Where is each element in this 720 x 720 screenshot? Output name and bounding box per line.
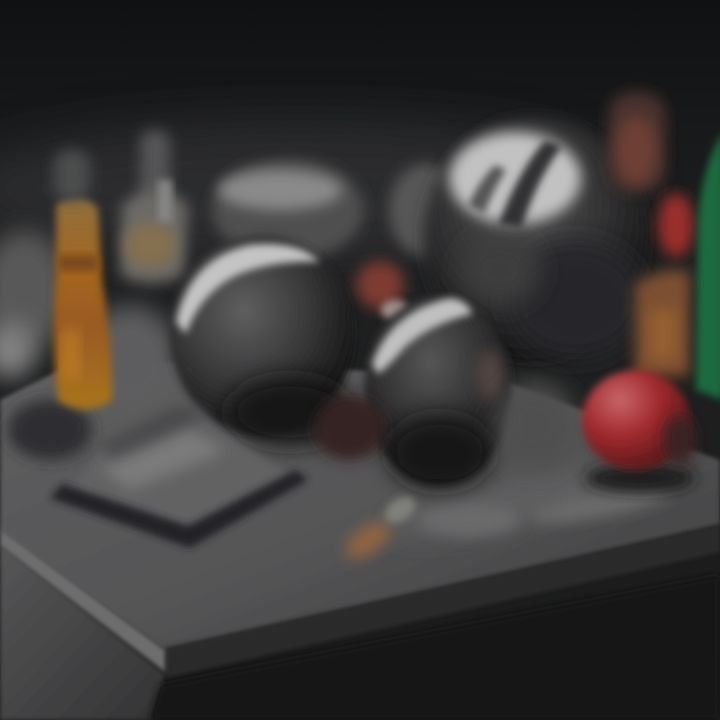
bottle: far right red-brown — [608, 92, 694, 380]
bottle neck — [54, 150, 90, 200]
sphere white highlight — [176, 244, 320, 334]
large sphere: back right — [423, 118, 647, 362]
tray lower rim — [50, 470, 308, 548]
sphere body — [423, 118, 647, 362]
bottle base shadow — [8, 400, 92, 460]
bottle body — [120, 190, 188, 284]
capsule body — [339, 514, 397, 566]
apple shadow — [585, 464, 695, 492]
sphere white highlight — [449, 132, 581, 224]
board: mottled patch centre — [420, 504, 520, 536]
back object: small grey jar — [389, 164, 461, 256]
bottle: second pale glass — [120, 130, 188, 284]
bottle: green at right edge — [696, 130, 720, 400]
board: top surface — [0, 360, 720, 650]
red blob — [356, 261, 404, 309]
amber bright streak — [650, 310, 676, 360]
sphere body — [364, 296, 512, 484]
small red accent in centre — [356, 261, 409, 320]
pale reflection — [381, 300, 409, 320]
apple body — [582, 370, 690, 470]
sphere dark stripe second — [468, 165, 506, 214]
tray: dark rounded plate on board — [50, 405, 308, 548]
glass reflection — [158, 180, 172, 222]
capsule light end — [380, 491, 420, 529]
bottle dark band — [58, 255, 98, 271]
warm reflection — [476, 351, 504, 399]
back object: silver dome centre — [212, 160, 364, 260]
bottle neck — [140, 130, 170, 202]
dark red object between spheres — [314, 396, 386, 460]
sphere shadow — [228, 378, 352, 446]
left haze: bright patch — [0, 322, 36, 378]
medium sphere: centre right — [364, 296, 512, 488]
red band — [658, 193, 694, 257]
tray upper rim — [100, 405, 210, 458]
dome highlight — [218, 170, 342, 210]
small pill: orange capsule on board — [339, 491, 420, 566]
sphere body — [170, 235, 354, 435]
left haze: grey clutter — [0, 230, 70, 350]
tray surface — [70, 412, 290, 530]
sphere mid-grey mottling — [460, 235, 540, 305]
dome body — [212, 160, 364, 260]
apple side shade — [664, 414, 696, 466]
left haze: clutter near tray — [80, 305, 180, 415]
bottle highlight — [64, 330, 78, 380]
floor: lower left surface — [0, 545, 165, 720]
sphere lower shade — [388, 416, 492, 488]
bottle red cap tint — [616, 116, 656, 184]
board: front edge left — [0, 528, 165, 672]
board: front edge right — [165, 525, 720, 678]
sphere white highlight — [372, 298, 472, 374]
small metal pieces right of centre — [495, 381, 575, 469]
bottle body — [53, 197, 112, 409]
sphere dark stripe — [498, 140, 562, 228]
background: soft glow behind objects — [0, 120, 640, 260]
large sphere: centre left — [170, 235, 354, 446]
amber tint — [124, 223, 176, 267]
bottle top — [608, 92, 666, 192]
board: mottled patch right — [529, 481, 671, 529]
floor: lower right shadow — [150, 575, 720, 720]
bottle: far left amber — [8, 150, 112, 460]
board: highlight speckle — [388, 451, 652, 549]
sphere lower shade — [505, 240, 645, 360]
amber body — [635, 270, 690, 380]
tray highlight — [100, 428, 225, 490]
slate board — [0, 360, 720, 678]
red apple — [582, 370, 696, 492]
